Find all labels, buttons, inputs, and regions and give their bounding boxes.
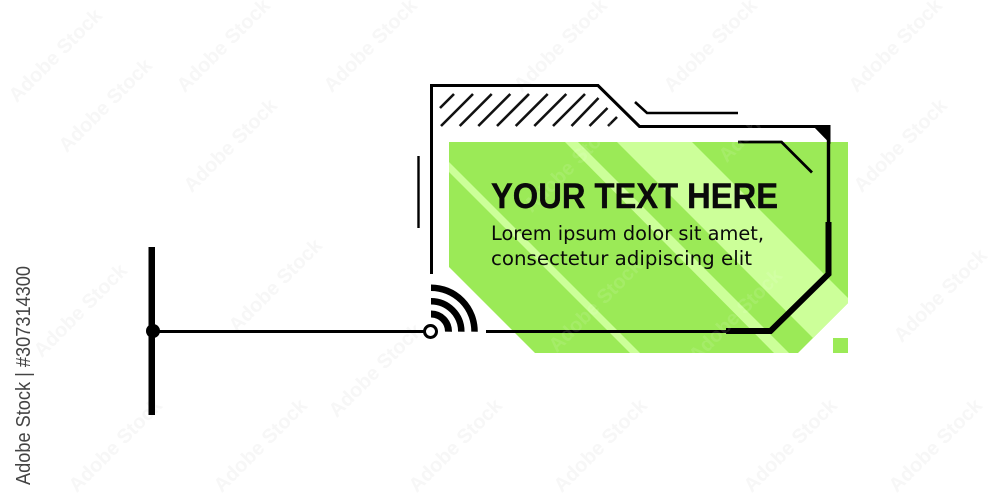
watermark pattern on white: Adobe Stock (210, 394, 312, 497)
watermark pattern on panel: Adobe Stock (715, 64, 817, 167)
watermark pattern on panel (520, 64, 817, 367)
watermark pattern on white: Adobe Stock (890, 244, 992, 347)
watermark pattern on panel: Adobe Stock (545, 254, 647, 357)
body text: consectetur adipiscing elit (491, 247, 752, 270)
body text (491, 222, 764, 270)
small green square (833, 338, 848, 353)
watermark pattern on white: Adobe Stock (325, 319, 427, 422)
top right accent line (635, 102, 738, 113)
watermark pattern on white: Adobe Stock (55, 54, 157, 157)
icon: ring node (424, 326, 436, 338)
watermark pattern on white: Adobe Stock (225, 234, 327, 337)
watermark pattern on panel: Adobe Stock (520, 114, 622, 217)
watermark pattern on white: Adobe Stock (5, 4, 107, 107)
frame outline (432, 86, 830, 332)
icon: signal arcs (431, 288, 475, 332)
body text: Lorem ipsum dolor sit amet, (491, 222, 764, 245)
stock id label: Adobe Stock | #307314300 (13, 266, 35, 485)
inner corner accent line (738, 142, 812, 172)
hatch pattern (440, 94, 617, 126)
watermark pattern on white: Adobe Stock (405, 394, 507, 497)
watermark pattern on white: Adobe Stock (180, 94, 282, 197)
watermark pattern on white: Adobe Stock (885, 394, 987, 497)
heading: YOUR TEXT HERE (491, 177, 778, 216)
watermark pattern on white: Adobe Stock (850, 94, 952, 197)
panel: green callout background (449, 142, 848, 353)
watermark pattern on white: Adobe Stock (65, 394, 167, 497)
watermark pattern on white: Adobe Stock (30, 259, 132, 362)
watermark pattern on white: Adobe Stock (740, 394, 842, 497)
left side accent line (417, 156, 420, 228)
connector line (155, 330, 425, 333)
watermark pattern on panel: Adobe Stock (685, 264, 787, 367)
vertical bar with node (146, 247, 160, 415)
watermark pattern on white: Adobe Stock (550, 394, 652, 497)
